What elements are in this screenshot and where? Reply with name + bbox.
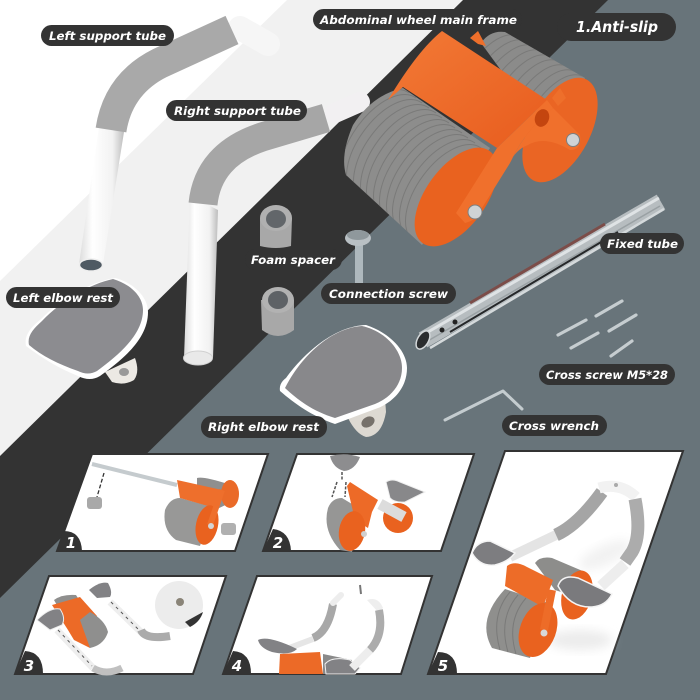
badge 5	[428, 652, 457, 675]
badge 4: 4	[231, 657, 242, 675]
badge 1	[57, 531, 82, 552]
badge 1: 1	[66, 534, 76, 552]
label: connection screw: Connection screw	[329, 287, 448, 301]
label: abdominal wheel main frame: Abdominal wheel main frame	[319, 13, 517, 27]
panel: step 3	[15, 576, 226, 675]
front wheel	[333, 88, 490, 245]
part: foam spacers	[260, 205, 294, 336]
label: connection screw	[321, 283, 456, 304]
step 3 magnified detail	[155, 581, 203, 629]
part: fixed tube	[413, 198, 664, 351]
label: right elbow rest	[201, 416, 327, 438]
label: left elbow rest: Left elbow rest	[13, 291, 114, 305]
part: right support tube	[184, 102, 360, 365]
front disc	[398, 133, 514, 261]
badge 3	[15, 651, 43, 675]
side arm	[456, 100, 553, 223]
label: left support tube	[41, 25, 174, 46]
badge 4	[223, 651, 251, 675]
label: right support tube: Right support tube	[174, 104, 301, 118]
step 2 wheel and parts	[326, 454, 425, 553]
part: left support tube	[79, 28, 268, 271]
step 3 assembly	[37, 583, 170, 672]
panel: step 4	[223, 576, 432, 675]
label: foam spacer: Foam spacer	[251, 253, 336, 267]
label: left elbow rest	[6, 287, 120, 308]
label: cross screw	[539, 364, 675, 385]
step 1 wheel	[164, 478, 239, 547]
label: anti-slip	[557, 13, 676, 41]
label: fixed tube: Fixed tube	[607, 237, 678, 251]
badge 3: 3	[24, 657, 34, 675]
label: anti-slip: 1.Anti-slip	[576, 18, 658, 36]
label: cross wrench: Cross wrench	[509, 419, 599, 433]
label: right elbow rest: Right elbow rest	[208, 420, 320, 434]
label: left support tube: Left support tube	[49, 29, 166, 43]
part: left elbow rest	[26, 278, 148, 384]
badge 2: 2	[273, 534, 283, 552]
badge 5: 5	[438, 657, 448, 675]
step 1 tube and spacers	[87, 464, 236, 535]
orange body	[388, 31, 547, 148]
part: cross screws	[558, 301, 636, 356]
rear wheel	[482, 32, 598, 182]
label: cross wrench	[502, 415, 607, 436]
label: fixed tube	[600, 233, 684, 254]
part: right elbow rest	[280, 325, 407, 437]
part: abdominal wheel main frame	[344, 31, 598, 246]
step 4 assembly	[258, 585, 383, 674]
panel: step 2	[263, 454, 474, 553]
panel: step 5	[428, 451, 683, 675]
panel: step 1	[57, 454, 268, 552]
part: cross wrench	[445, 391, 522, 420]
part: connection screw	[345, 230, 371, 283]
badge 2	[263, 529, 291, 552]
label: foam spacer	[245, 249, 342, 270]
step 5 assembled product	[472, 483, 638, 662]
label: right support tube	[166, 100, 307, 121]
label: abdominal wheel main frame	[313, 9, 522, 30]
label: cross screw: Cross screw M5*28	[546, 368, 668, 382]
bolts	[468, 205, 482, 219]
